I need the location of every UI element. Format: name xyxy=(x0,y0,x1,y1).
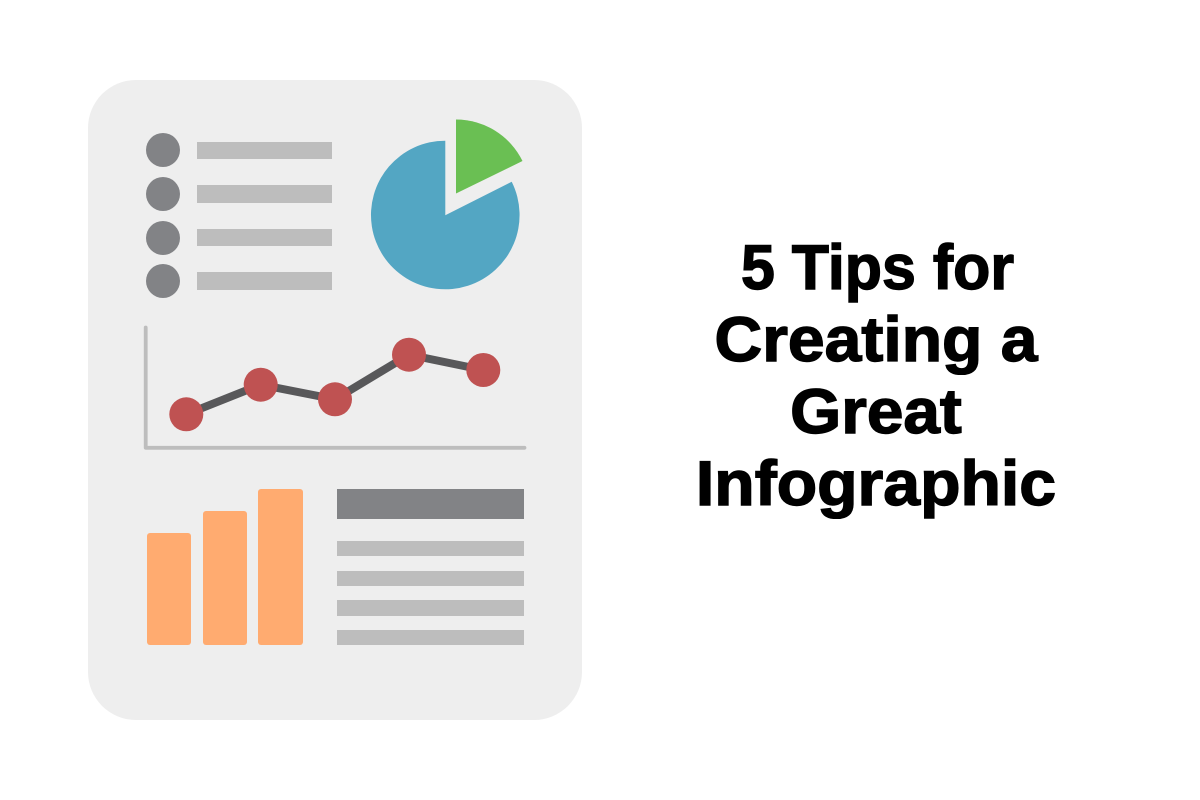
title: Great xyxy=(790,377,962,447)
text block placeholder xyxy=(337,489,524,645)
line chart xyxy=(146,328,524,448)
title xyxy=(696,233,1056,519)
bar chart xyxy=(147,489,303,645)
title: 5 Tips for xyxy=(741,233,1014,303)
title: Creating a xyxy=(715,305,1037,375)
list with bullets xyxy=(146,133,332,298)
title: Infographic xyxy=(696,449,1056,519)
panel: document sheet xyxy=(88,80,582,720)
pie chart xyxy=(371,120,522,289)
